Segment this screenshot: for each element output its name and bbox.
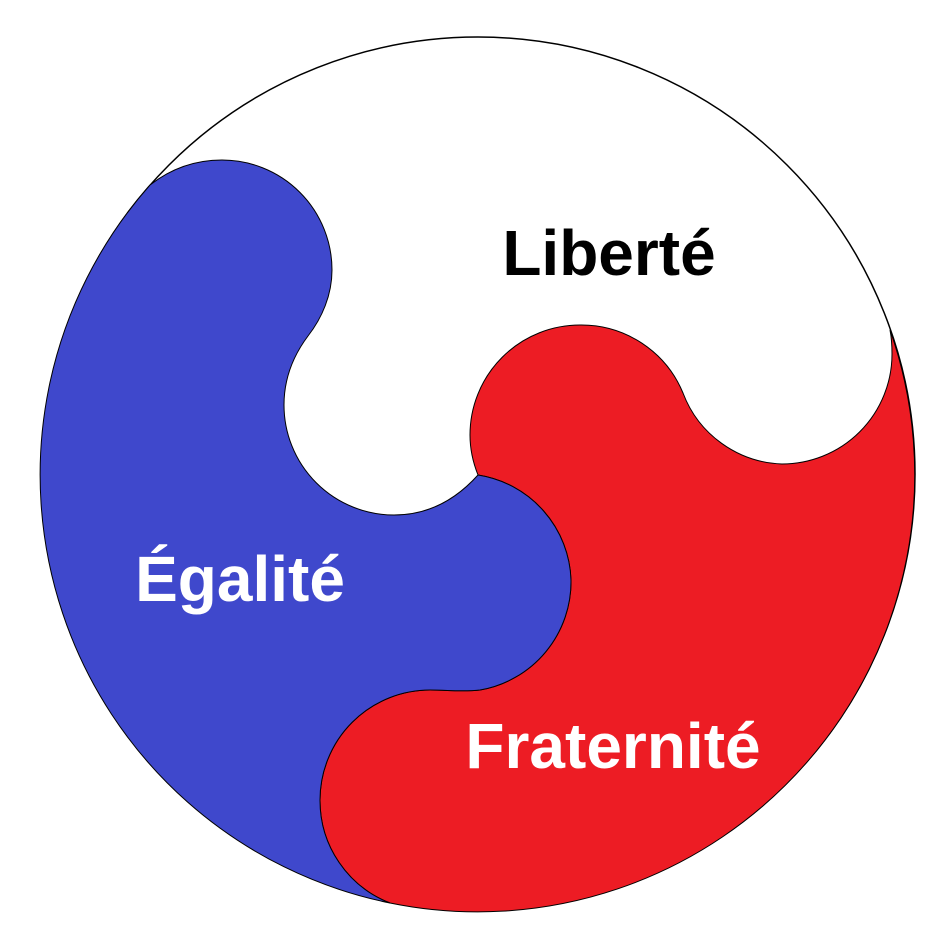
label: Liberté: Liberté — [502, 217, 716, 289]
label: Fraternité: Fraternité — [465, 710, 761, 782]
panel: blue Égalité segment — [40, 160, 571, 903]
panel: red Fraternité segment — [320, 325, 915, 912]
label: Égalité: Égalité — [135, 543, 345, 615]
